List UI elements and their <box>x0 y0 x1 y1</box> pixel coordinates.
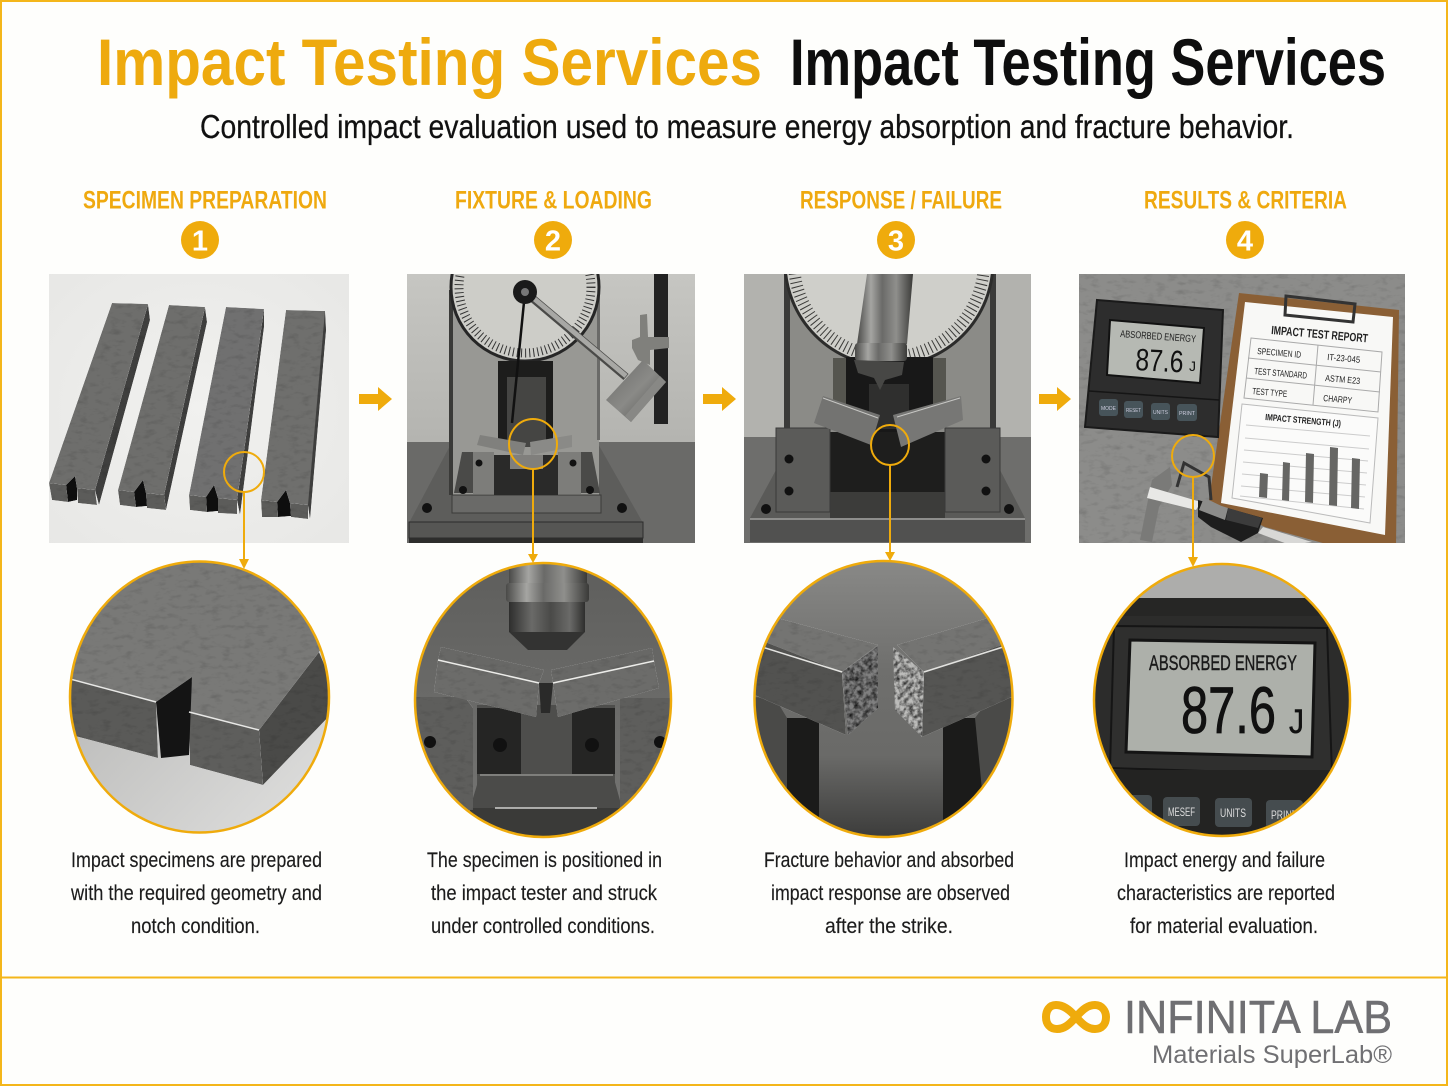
display value: 87.6 <box>1181 673 1276 747</box>
arrow: step 3 to 4 <box>1039 387 1071 411</box>
device buttons: MESEF <box>1168 805 1195 819</box>
detail circle: notch close-up <box>68 560 330 834</box>
caption: step 3 <box>764 848 1014 938</box>
caption: step 4: for material evaluation. <box>1130 914 1318 938</box>
photo: impact tester with specimen <box>407 274 695 543</box>
caption: step 1: with the required geometry and <box>70 881 322 905</box>
display unit: J <box>1289 703 1304 741</box>
clipboard with test report: ASTM E23 <box>1325 373 1361 386</box>
clipboard with test report <box>1209 293 1399 545</box>
caption: step 2 <box>427 848 662 938</box>
clipboard with test report: IT-23-045 <box>1327 352 1361 365</box>
callout marker: step 4 <box>1172 435 1214 567</box>
caption: step 4 <box>1117 848 1335 938</box>
caption: step 3: impact response are observed <box>771 881 1010 905</box>
digital readout device: J <box>1189 358 1196 374</box>
arrow: step 2 to 3 <box>703 387 736 411</box>
caption: step 2: under controlled conditions. <box>431 914 655 938</box>
caption: step 2: the impact tester and struck <box>431 881 657 905</box>
step 1 number badge <box>181 221 219 259</box>
step 1 number badge: 1 <box>192 226 208 258</box>
icon: infinity symbol <box>1046 1005 1106 1029</box>
digital readout device: UNITS <box>1153 410 1168 416</box>
caption: step 1: Impact specimens are prepared <box>71 848 322 872</box>
step 2 number badge <box>534 221 572 259</box>
caption: step 1: notch condition. <box>131 914 260 938</box>
clipboard with test report: TEST STANDARD <box>1254 366 1308 381</box>
caption: step 4: characteristics are reported <box>1117 881 1335 905</box>
device buttons: PRINT <box>1271 808 1297 822</box>
callout marker: step 1 <box>224 452 264 569</box>
device buttons: UNITS <box>1220 806 1246 820</box>
step 3 heading: RESPONSE / FAILURE <box>800 186 1002 214</box>
step 4 number badge <box>1226 221 1264 259</box>
wordmark: INFINITA LAB <box>1124 991 1392 1043</box>
photo: notched specimens <box>49 274 349 543</box>
clipboard with test report: TEST TYPE <box>1252 386 1288 399</box>
detail circle: fracture faces <box>750 556 1018 841</box>
logo: Infinita Lab <box>1046 991 1393 1069</box>
clipboard with test report: CHARPY <box>1323 393 1353 406</box>
caption: step 4: Impact energy and failure <box>1124 848 1325 872</box>
digital readout device: 87.6 <box>1135 342 1184 380</box>
step 4 number badge: 4 <box>1237 226 1253 258</box>
clipboard with test report: IMPACT STRENGTH (J) <box>1265 412 1341 429</box>
detail circle: striker and supported specimen <box>410 560 676 840</box>
title: yellow: Impact Testing Services <box>97 25 762 99</box>
digital readout device: MODE <box>1101 406 1116 412</box>
digital readout device: PRINT <box>1179 411 1196 417</box>
step 2 number badge: 2 <box>545 226 561 258</box>
callout marker: step 3 <box>871 425 909 561</box>
tagline: Materials SuperLab® <box>1152 1041 1393 1069</box>
caption: step 3: Fracture behavior and absorbed <box>764 848 1014 872</box>
caption: step 1 <box>70 848 322 938</box>
clipboard with test report: IMPACT TEST REPORT <box>1271 323 1369 345</box>
step 1 heading: SPECIMEN PREPARATION <box>83 186 327 214</box>
digital readout device: ABSORBED ENERGY <box>1120 329 1197 345</box>
caliper <box>1140 463 1312 545</box>
clipboard with test report: SPECIMEN ID <box>1257 346 1302 360</box>
photo: readout, report and caliper <box>1079 274 1405 545</box>
callout marker: step 2 <box>509 419 557 563</box>
arrow: step 1 to 2 <box>359 387 392 411</box>
step 3 number badge <box>877 221 915 259</box>
device buttons <box>1125 795 1303 829</box>
digital readout device: RESET <box>1126 408 1142 414</box>
subtitle: Controlled impact evaluation used to measure energy absorption and fracture behavior. <box>200 108 1294 145</box>
digital readout device <box>1085 300 1223 437</box>
step 3 number badge: 3 <box>888 226 904 258</box>
step 4 heading: RESULTS & CRITERIA <box>1144 186 1347 214</box>
step 2 heading: FIXTURE & LOADING <box>455 186 652 214</box>
caption: step 2: The specimen is positioned in <box>427 848 662 872</box>
detail circle: absorbed energy display <box>1090 560 1355 840</box>
display label: ABSORBED ENERGY <box>1149 652 1297 675</box>
photo: fractured specimen <box>744 274 1031 543</box>
caption: step 3: after the strike. <box>825 914 953 938</box>
